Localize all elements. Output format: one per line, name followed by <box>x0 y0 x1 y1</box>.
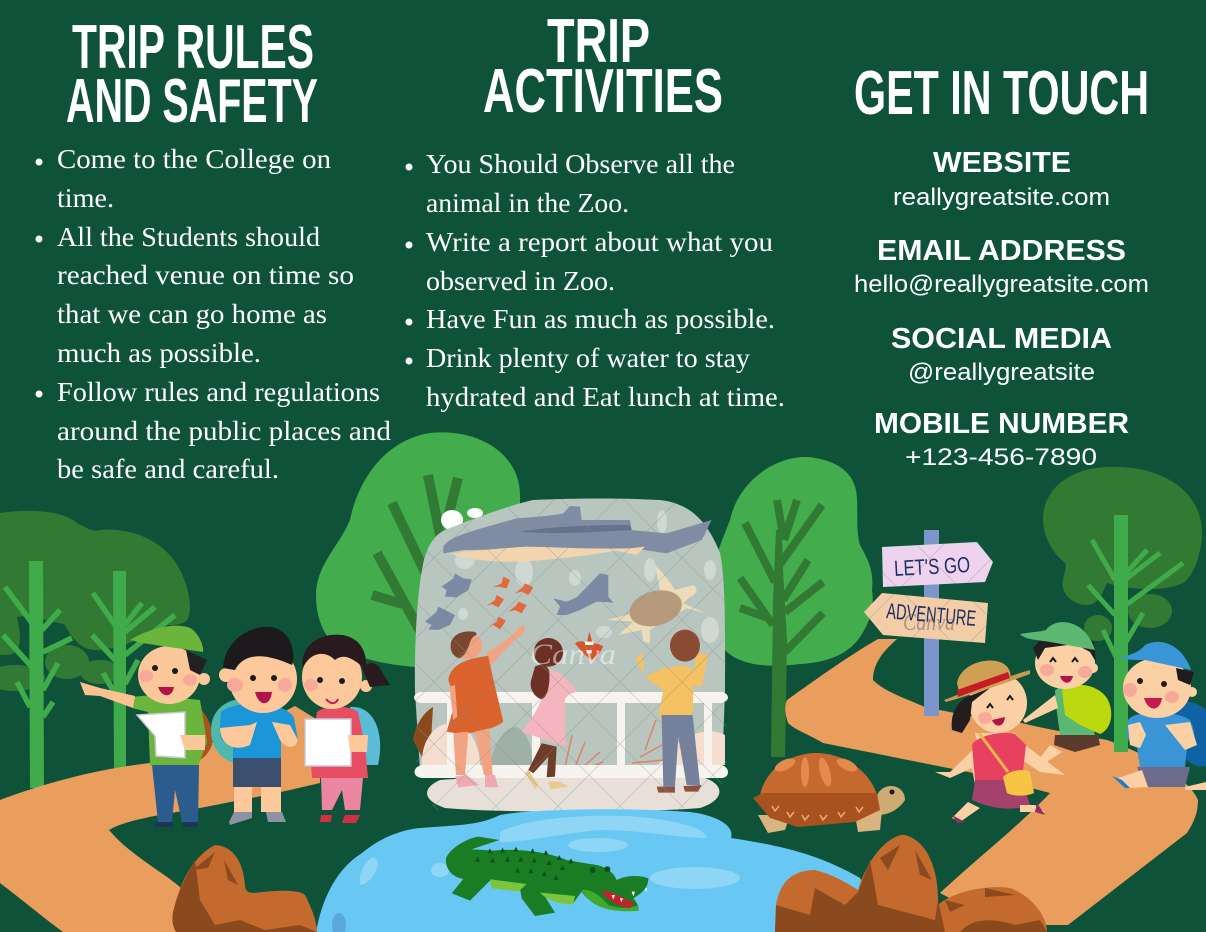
contact: email address: hello@reallygreatsite.com <box>854 271 1149 298</box>
child in pink dress <box>522 638 577 789</box>
boy with green cap and lime backpack <box>1020 622 1111 763</box>
kid with green cap pointing <box>80 626 212 827</box>
rules list: All the Students should <box>57 222 321 252</box>
girl with straw hat <box>935 661 1065 823</box>
sign: let's go <box>882 542 993 587</box>
activities list: Have Fun as much as possible. <box>426 304 775 334</box>
glass railing <box>414 692 728 770</box>
rules list: Follow rules and regulations <box>57 377 380 407</box>
clownfish <box>575 632 603 660</box>
aquarium scene <box>413 498 728 812</box>
title: trip rules and safety <box>66 13 318 136</box>
left rocks <box>172 845 317 932</box>
contact: mobile number: MOBILE NUMBER <box>874 408 1129 440</box>
contact: mobile number <box>874 408 1129 471</box>
rules list: around the public places and <box>57 416 392 446</box>
left trees <box>0 511 190 788</box>
rules list: Come to the College on <box>57 144 332 174</box>
title: trip rules and safety: AND SAFETY <box>66 67 318 136</box>
contact: social media: @reallygreatsite <box>908 359 1095 386</box>
whale shark <box>443 506 712 562</box>
tank floor decorations <box>422 720 725 767</box>
child in orange dress <box>447 625 525 787</box>
lattice overlay <box>415 498 727 810</box>
activities list: Write a report about what you <box>426 227 774 257</box>
contact: website: WEBSITE <box>933 147 1071 179</box>
orange fish school <box>487 577 533 629</box>
rules list: be safe and careful. <box>57 454 279 484</box>
sea turtle <box>607 565 707 643</box>
centre tree behind aquarium <box>316 432 520 668</box>
boy with blue cap <box>1112 642 1206 790</box>
right tree canopy and trunk <box>1043 467 1202 752</box>
water bubbles <box>455 510 719 643</box>
kid with blue shirt <box>211 627 298 825</box>
right rocks <box>775 835 1047 932</box>
rules list: much as possible. <box>57 338 261 368</box>
title: trip activities: TRIP <box>547 7 650 76</box>
pond <box>316 809 890 932</box>
title: trip activities <box>483 7 723 126</box>
rules list: that we can go home as <box>57 299 327 329</box>
blue fish <box>425 573 613 630</box>
left path <box>0 706 321 932</box>
sign: adventure <box>864 593 988 643</box>
child in yellow shirt <box>635 630 708 793</box>
aquarium bubble decoration <box>441 508 483 530</box>
activities list <box>406 149 785 412</box>
sign: let's go: LET'S GO <box>893 552 971 581</box>
sign: adventure: ADVENTURE <box>885 598 977 631</box>
crocodile <box>446 837 648 916</box>
right path <box>785 639 1198 925</box>
contact: email address <box>854 235 1149 298</box>
canva watermark: Canva <box>530 638 616 671</box>
activities list: Drink plenty of water to stay <box>426 343 751 373</box>
lower rail <box>414 765 728 778</box>
aquarium glass <box>415 498 725 770</box>
title: trip activities: ACTIVITIES <box>483 57 723 126</box>
right tree <box>707 457 873 757</box>
contact: social media <box>891 323 1112 386</box>
rules list <box>36 144 392 484</box>
activities list: hydrated and Eat lunch at time. <box>426 382 785 412</box>
contact: mobile number: +123-456-7890 <box>905 444 1097 471</box>
sign: adventure: Canva <box>903 610 955 636</box>
walkway floor <box>427 776 719 812</box>
contact: email address: EMAIL ADDRESS <box>877 235 1126 267</box>
activities list: observed in Zoo. <box>426 266 615 296</box>
title: trip rules and safety: TRIP RULES <box>72 13 314 82</box>
activities list: You Should Observe all the <box>426 149 735 179</box>
rules list: reached venue on time so <box>57 260 354 290</box>
brown rock behind tank edge <box>413 707 433 757</box>
contact: website <box>893 147 1110 211</box>
contact: website: reallygreatsite.com <box>893 184 1110 211</box>
signpost <box>864 530 993 716</box>
contact: social media: SOCIAL MEDIA <box>891 323 1112 355</box>
activities list: animal in the Zoo. <box>426 188 629 218</box>
kid with pink dress and paper <box>302 635 390 823</box>
rules list: time. <box>57 183 114 213</box>
tortoise <box>753 753 905 833</box>
